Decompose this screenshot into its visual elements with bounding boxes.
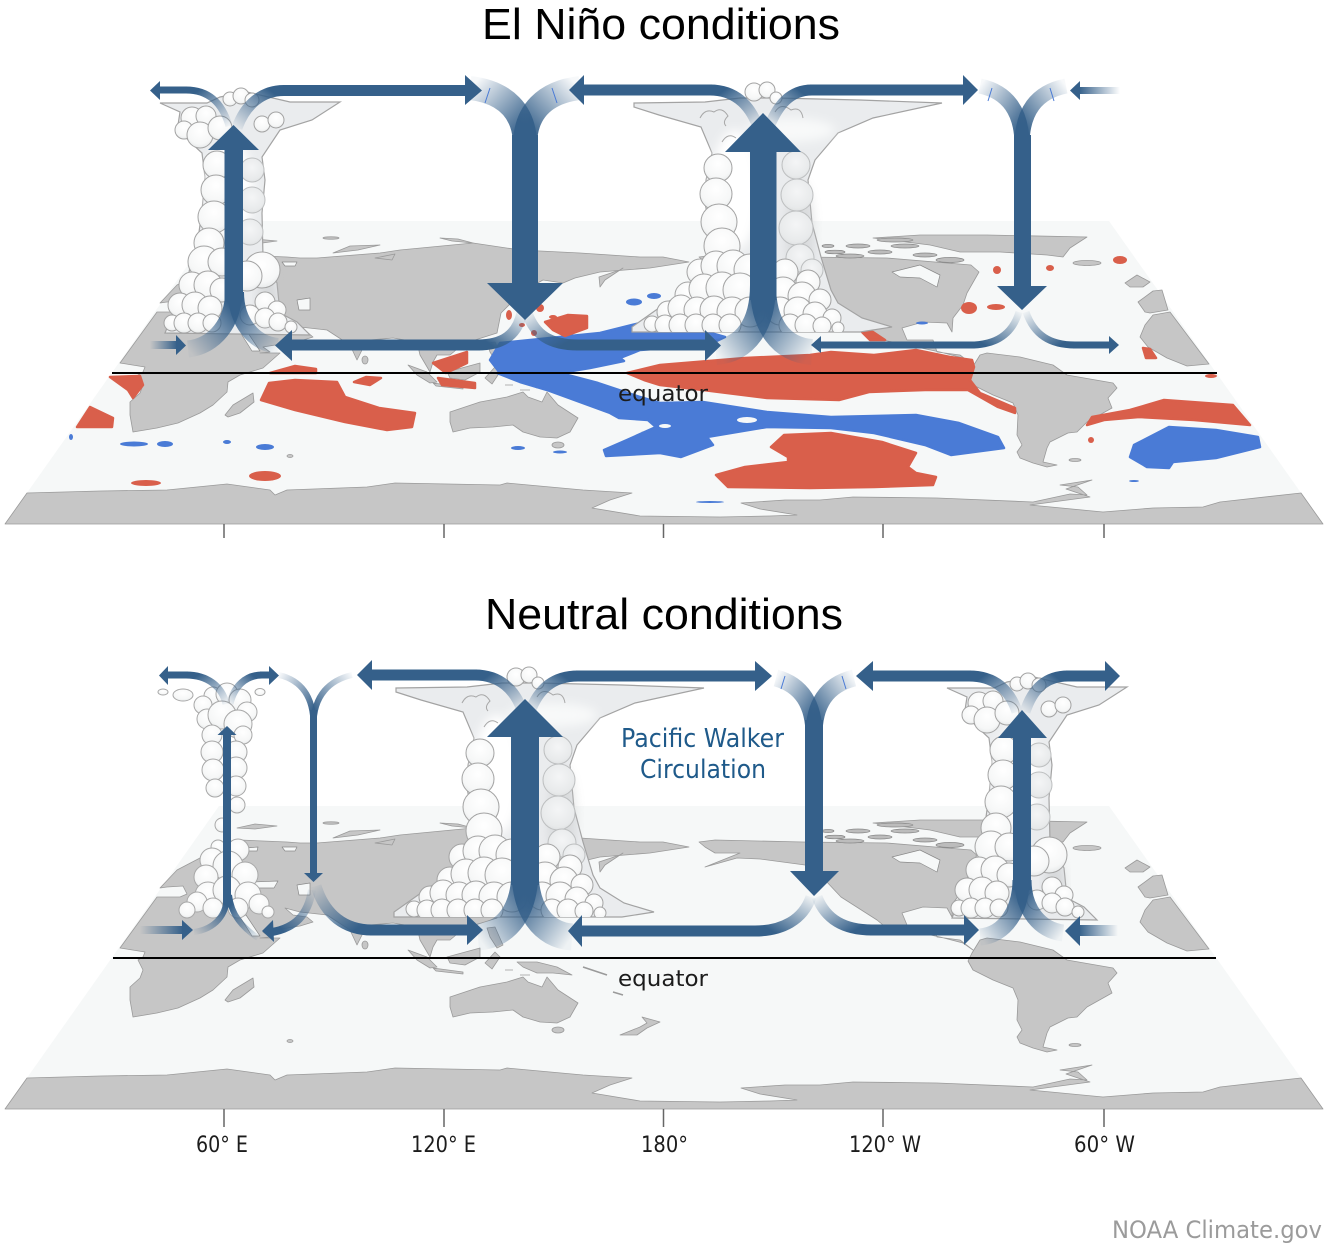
longitude labels: 180° (641, 1133, 688, 1158)
arrow: upper westward from Americas (856, 661, 1017, 712)
cloud: thin Indian Ocean column (158, 683, 274, 918)
arrow: strong rising air over central Pacific (716, 113, 812, 352)
longitude labels (196, 1133, 1135, 1158)
title: El Niño conditions: El Niño conditions (482, 0, 840, 49)
arrow: surface westward from Americas (811, 312, 1019, 353)
arrow: upper eastward near 60E (230, 666, 279, 704)
arrow: upper eastward from western Pacific (530, 661, 772, 712)
arrow: upper level eastward toward western Pacific (237, 75, 482, 128)
map plane: El Niño (5, 221, 1323, 524)
arrow: weak rising air near 60E (194, 726, 258, 938)
cloud: Indian Ocean column (160, 88, 340, 335)
arrow: upper level eastward from central Pacific (769, 75, 978, 127)
equator label: equator (618, 382, 709, 407)
arrow: strong rising air over western Pacific (478, 699, 572, 937)
longitude labels: 60° E (196, 1133, 248, 1158)
arrow: sinking air over western Pacific (470, 88, 580, 320)
panel: Neutral conditions (5, 590, 1323, 1158)
equator label: equator (618, 967, 709, 992)
arrow: surface westward from western Pacific (275, 313, 522, 361)
equator line (113, 957, 1216, 959)
equator line (112, 372, 1217, 374)
arrow: surface westward from eastern Pacific (568, 897, 811, 947)
panel: El Niño conditions (5, 0, 1323, 538)
arrow: surface inflow at left edge (150, 335, 186, 355)
arrow: surface eastward from Americas (1026, 312, 1119, 354)
label: Pacific Walker Circulation: Circulation (640, 755, 766, 785)
arrow: upper level westward from central Pacific (569, 75, 758, 127)
longitude labels: 60° W (1074, 1133, 1135, 1158)
label: Pacific Walker Circulation: Pacific Walker (621, 724, 784, 754)
map plane: Neutral (5, 806, 1323, 1109)
arrow: surface eastward from western Pacific (527, 313, 721, 361)
arrow: sinking air over eastern Pacific (776, 676, 854, 896)
arrow: surface inflow at left edge (140, 920, 193, 940)
sea temperature anomalies: warm red and cool blue patches (69, 256, 1260, 503)
arrow: upper westward near 60E (159, 666, 226, 704)
arrow: rising air over Americas (980, 710, 1063, 937)
arrow: upper westward from western Pacific (357, 660, 522, 710)
cloud: western Pacific column (394, 667, 704, 921)
title: Neutral conditions: Neutral conditions (485, 590, 843, 639)
longitude ticks (224, 524, 1104, 538)
label: Pacific Walker Circulation (621, 724, 784, 785)
arrow: surface westward near 90E (262, 890, 312, 942)
arrow: upper eastward from Americas (1025, 661, 1120, 712)
arrow: upper level westward from Indian Ocean (150, 81, 229, 126)
world land: Neutral map (5, 820, 1323, 1109)
cloud: central Pacific column (632, 82, 942, 336)
world land: El Niño map (5, 235, 1323, 524)
longitude ticks (224, 1109, 1104, 1127)
arrow: upper level inflow at right edge (1070, 81, 1120, 100)
arrow: surface eastward to western Pacific (316, 886, 483, 945)
arrow: surface inflow at right edge (1065, 916, 1118, 946)
arrow: rising air over Indian Ocean (188, 125, 278, 349)
longitude labels: 120° E (411, 1133, 476, 1158)
arrow: sinking air over Americas (980, 86, 1066, 310)
cloud: Americas column (947, 673, 1127, 920)
arrow: thin sinking air near 90E (279, 675, 352, 882)
arrow: surface eastward from eastern Pacific (817, 897, 979, 945)
longitude labels: 120° W (849, 1133, 921, 1158)
credit: NOAA Climate.gov: NOAA Climate.gov (1112, 1216, 1322, 1244)
